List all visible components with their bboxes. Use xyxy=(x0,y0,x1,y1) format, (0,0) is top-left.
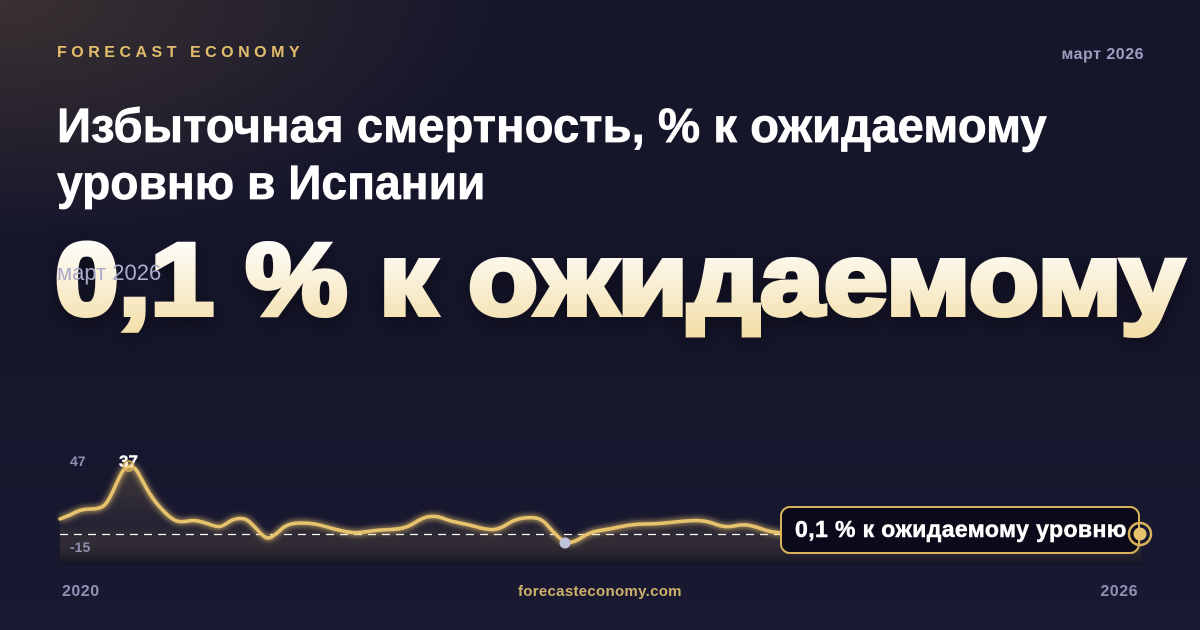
big value: 0,1 % к ожидаемому xyxy=(55,222,1184,336)
y axis max label: 47 xyxy=(70,453,86,469)
peak marker xyxy=(124,461,134,471)
area under curve xyxy=(60,466,1141,565)
current value callout: 0,1 % к ожидаемому уровню xyxy=(795,516,1127,542)
title: уровню в Испании xyxy=(57,157,485,210)
y axis min label: -15 xyxy=(70,539,90,555)
source link: forecasteconomy.com xyxy=(518,583,682,600)
x axis start year: 2020 xyxy=(62,583,100,600)
title xyxy=(56,100,1047,210)
peak value label: 37 xyxy=(119,452,138,471)
line glow xyxy=(60,466,782,543)
x axis end year: 2026 xyxy=(1100,583,1138,600)
minimum marker xyxy=(560,538,570,548)
data line xyxy=(60,466,782,543)
date top right: март 2026 xyxy=(1062,46,1144,63)
current value marker xyxy=(1128,522,1152,546)
overlapping date label: март 2026 xyxy=(57,260,161,285)
title: Избыточная смертность, % к ожидаемому xyxy=(57,100,1047,153)
current value callout xyxy=(780,506,1140,554)
brand label: FORECAST ECONOMY xyxy=(57,44,304,61)
zero baseline xyxy=(60,534,1141,536)
